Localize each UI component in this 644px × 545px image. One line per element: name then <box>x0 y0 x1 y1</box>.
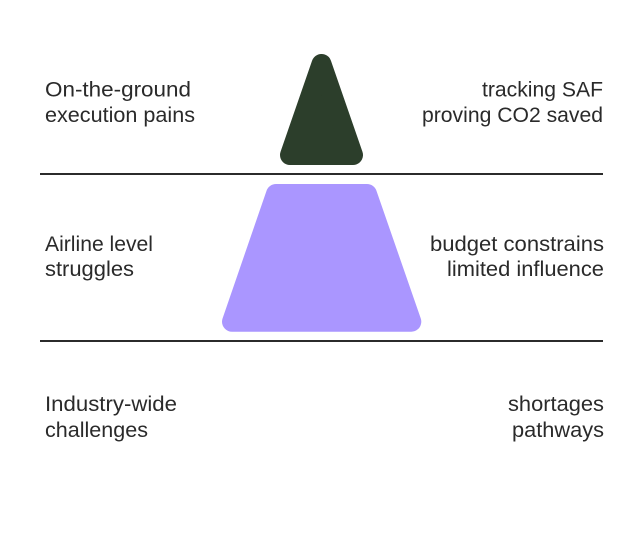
right label: budget and influence: limited influence <box>447 258 604 281</box>
left label: industry-wide <box>45 393 177 442</box>
pyramid middle: purple trapezoid <box>232 194 411 322</box>
left label: airline level <box>45 233 153 281</box>
pyramid top: dark green triangle <box>290 64 353 155</box>
left label: airline level: Airline level <box>45 233 153 256</box>
right label: tracking and proving: proving CO2 saved <box>422 104 603 127</box>
divider line upper <box>40 173 603 175</box>
right label: budget and influence: budget constrains <box>430 233 604 256</box>
right label: shortages and pathways: pathways <box>512 419 604 442</box>
right label: shortages and pathways: shortages <box>508 393 604 416</box>
divider line lower <box>40 340 603 342</box>
left label: on-the-ground: execution pains <box>45 104 195 127</box>
right label: tracking and proving <box>422 78 603 127</box>
right label: tracking and proving: tracking SAF <box>482 78 603 102</box>
right label: budget and influence <box>430 233 604 281</box>
left label: on-the-ground <box>45 78 195 127</box>
left label: industry-wide: Industry-wide <box>45 393 177 416</box>
left label: on-the-ground: On-the-ground <box>45 78 191 102</box>
left label: airline level: struggles <box>45 258 134 281</box>
right label: shortages and pathways <box>508 393 604 442</box>
left label: industry-wide: challenges <box>45 419 148 442</box>
